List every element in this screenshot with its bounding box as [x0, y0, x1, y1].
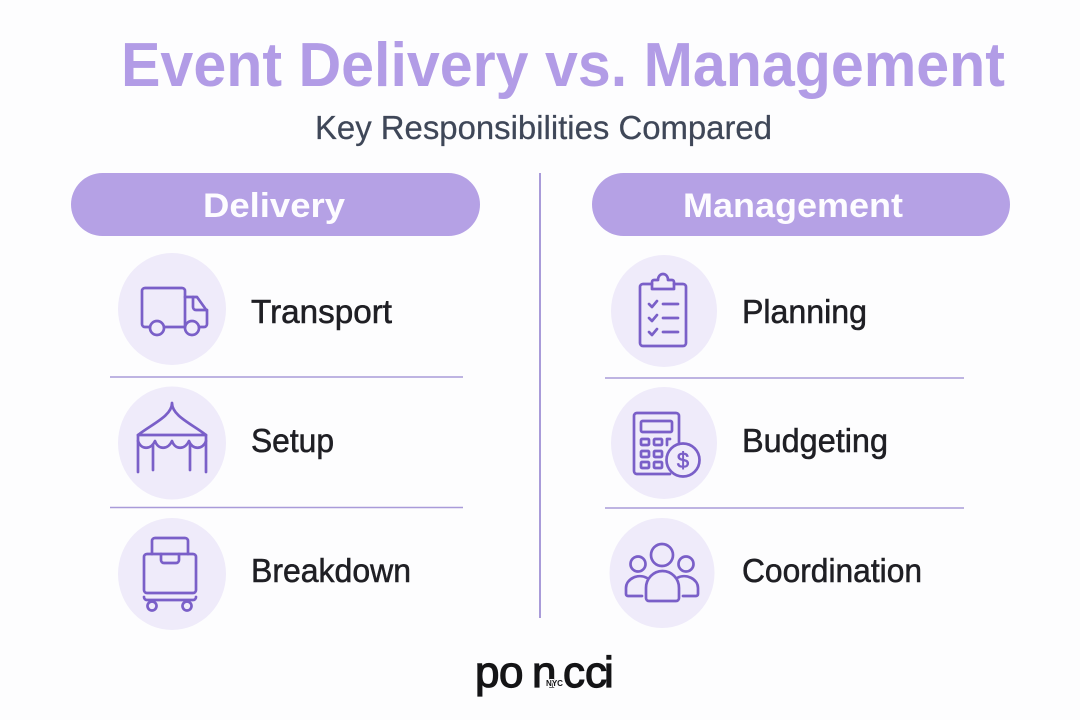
- icon: calculator with coin: $: [677, 448, 689, 473]
- header pill: Delivery: [71, 173, 480, 236]
- icon: tent: [118, 386, 226, 500]
- header pill: Management: [592, 173, 1010, 236]
- label: Planning: Planning: [742, 293, 867, 330]
- icon: three people: [610, 518, 714, 628]
- label: Transport: Transport: [251, 293, 392, 330]
- label: Coordination: Coordination: [742, 552, 922, 589]
- title: Event Delivery vs. Management: [121, 31, 1005, 100]
- icon: truck: [118, 253, 226, 365]
- subtitle: Key Responsibilities Compared: [315, 109, 772, 146]
- logo: poncci NYC: poncci: [475, 648, 614, 697]
- label: Setup: Setup: [251, 422, 334, 459]
- icon: calculator with coin: [611, 387, 717, 499]
- logo: poncci NYC: NYC: [546, 679, 563, 688]
- icon: trolley with box: [118, 518, 226, 630]
- label: Budgeting: Budgeting: [742, 422, 888, 459]
- header pill: Delivery: Delivery: [203, 187, 345, 225]
- icon: clipboard checklist: [611, 255, 717, 367]
- header pill: Management: Management: [683, 187, 903, 225]
- label: Breakdown: Breakdown: [251, 552, 411, 589]
